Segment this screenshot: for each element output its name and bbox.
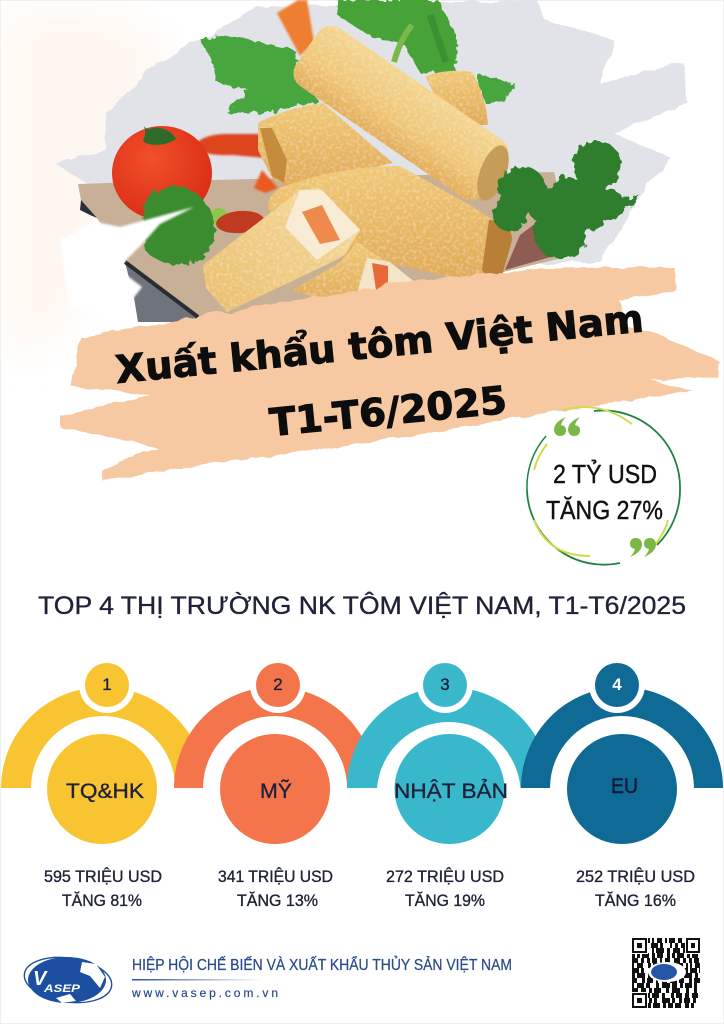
icon: VASEP logo bbox=[21, 952, 115, 1008]
growth 3: TĂNG 19% bbox=[405, 891, 485, 910]
arc 2 backing bbox=[203, 716, 347, 788]
arc 2 band bbox=[174, 687, 376, 788]
label EU: EU bbox=[611, 775, 638, 798]
icon: VASEP logo: ASEP bbox=[43, 983, 81, 995]
growth 4: TĂNG 16% bbox=[595, 891, 676, 910]
value 4: 252 TRIỆU USD bbox=[576, 867, 695, 886]
tomato bbox=[112, 125, 212, 220]
faint background texture bbox=[8, 12, 170, 350]
section heading: TOP 4 THỊ TRƯỜNG NK TÔM VIỆT NAM, T1-T6/2025 bbox=[38, 591, 686, 620]
circle MY bbox=[220, 734, 330, 844]
arc 1 bbox=[1, 687, 205, 788]
left roll bbox=[258, 103, 393, 187]
arc 4 band bbox=[521, 687, 723, 788]
broccoli bbox=[143, 186, 265, 265]
large top roll bbox=[287, 20, 515, 206]
market 2: USA bbox=[174, 657, 376, 910]
badge value: 2 TỶ USD bbox=[553, 459, 657, 489]
rank 2 bbox=[250, 657, 306, 713]
circle EU bbox=[567, 734, 677, 844]
circle TQ&HK bbox=[47, 734, 157, 844]
callout badge: total export bbox=[527, 407, 680, 565]
lower long roll bbox=[268, 166, 512, 278]
front small roll bbox=[293, 242, 417, 305]
quote mark close bbox=[630, 538, 656, 557]
front cut roll bbox=[203, 188, 360, 312]
value 3: 272 TRIỆU USD bbox=[386, 867, 504, 886]
title brush stroke bbox=[60, 267, 720, 480]
rank 1: 1 bbox=[102, 675, 112, 694]
circle Japan bbox=[394, 734, 504, 844]
arc 4 backing bbox=[550, 716, 694, 788]
footer bbox=[21, 937, 701, 1009]
market 1: China and Hong Kong bbox=[1, 657, 205, 910]
title line 2: T1-T6/2025 bbox=[268, 378, 509, 445]
divider bbox=[132, 979, 262, 980]
badge rings bbox=[527, 407, 680, 565]
quote mark open bbox=[554, 417, 580, 436]
label Japan: NHẬT BẢN bbox=[394, 780, 508, 803]
organisation name: HIỆP HỘI CHẾ BIẾN VÀ XUẤT KHẨU THỦY SẢN VIỆT NAM bbox=[132, 955, 512, 974]
rank 4 bbox=[589, 657, 645, 713]
growth 1: TĂNG 81% bbox=[62, 891, 142, 910]
growth 2: TĂNG 13% bbox=[237, 891, 318, 910]
label MY: MỸ bbox=[260, 779, 292, 803]
website: www.vasep.com.vn bbox=[131, 986, 278, 1000]
left celery leaf bbox=[199, 36, 318, 113]
market 4: EU bbox=[521, 657, 723, 910]
market 3: Japan bbox=[347, 657, 550, 910]
value 2: 341 TRIỆU USD bbox=[218, 867, 333, 886]
title line 1: Xuất khẩu tôm Việt Nam bbox=[114, 296, 645, 392]
arc 3 band bbox=[347, 687, 550, 788]
label TQ&HK: TQ&HK bbox=[66, 780, 144, 803]
value 1: 595 TRIỆU USD bbox=[44, 867, 162, 886]
rank 3 bbox=[417, 657, 473, 713]
top celery leaf bbox=[337, 0, 457, 73]
white brush cut bbox=[60, 207, 194, 312]
parsley bbox=[493, 141, 641, 259]
shrimp tail top bbox=[277, 0, 314, 56]
icon: VASEP logo: V bbox=[33, 968, 48, 990]
shrimp tail left bbox=[193, 134, 266, 158]
QR code bbox=[631, 937, 701, 1009]
arc 3 backing bbox=[377, 716, 521, 788]
rank 1 bbox=[79, 657, 135, 713]
right celery leaf bbox=[475, 73, 517, 103]
badge growth: TĂNG 27% bbox=[546, 495, 663, 525]
rank 2: 2 bbox=[273, 675, 283, 694]
rear roll bbox=[425, 71, 488, 125]
food photo illustration bbox=[55, 0, 688, 322]
plate bbox=[78, 172, 575, 322]
rank 3: 3 bbox=[440, 675, 450, 694]
title bbox=[114, 296, 645, 445]
grey brush backdrop bbox=[55, 0, 688, 270]
shrimp tail small bbox=[254, 170, 278, 193]
rank 4: 4 bbox=[612, 675, 622, 694]
